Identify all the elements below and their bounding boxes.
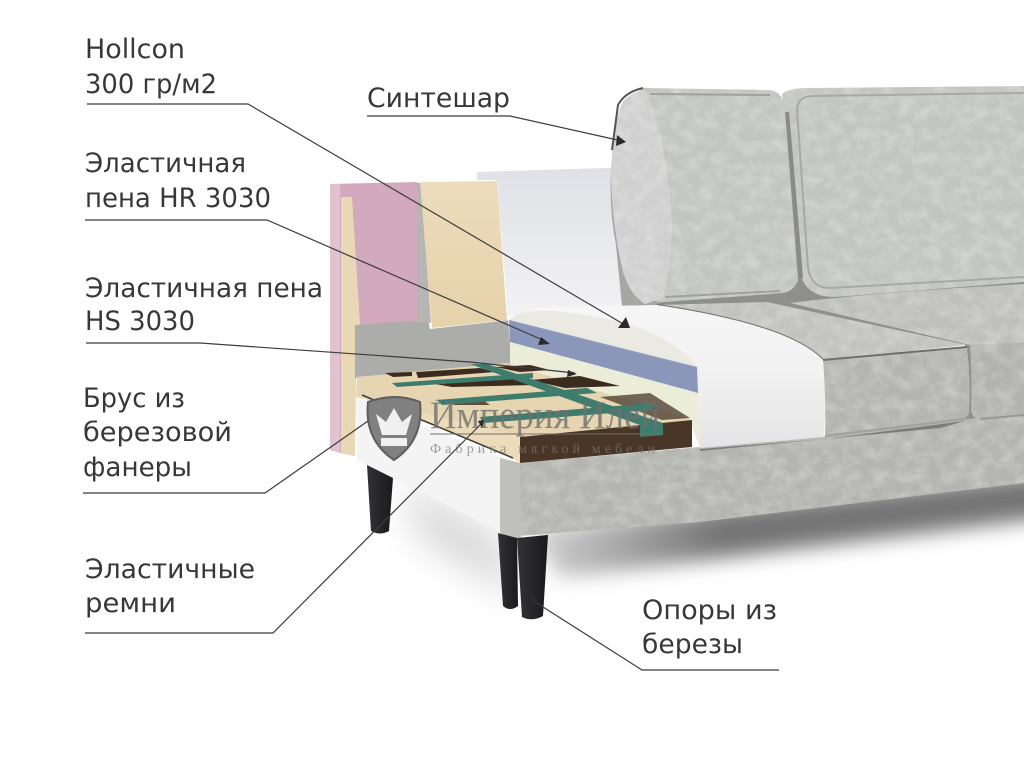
- seat shadow: [700, 421, 965, 451]
- label: Hollcon: Hollcon: [85, 34, 185, 65]
- back cushion right: fold: [787, 112, 801, 278]
- seat foam: cream edge: [509, 311, 697, 367]
- seat cushion left: front: [823, 347, 970, 437]
- seat cushion right: [790, 284, 1024, 419]
- watermark: [368, 394, 660, 460]
- label: Эластичные ремни: [85, 420, 484, 633]
- label: пена HR 3030: Эластичная: [85, 148, 246, 179]
- arm frame: plywood panel: [420, 181, 507, 328]
- back foam block: [477, 168, 640, 317]
- label: Брус из березовой фанеры: березовой: [83, 417, 232, 448]
- back cushion left: [620, 88, 798, 304]
- sofa shadow backing: [640, 100, 1024, 425]
- back cushion seam: [612, 88, 643, 150]
- frame: plywood side: [356, 395, 520, 463]
- floor shadow: [400, 470, 1024, 600]
- frame: plywood deck: [356, 363, 692, 437]
- back cushion side shadow: [611, 170, 657, 306]
- back cushion right: [782, 86, 1024, 297]
- label: Брус из березовой фанеры: Брус из: [83, 383, 185, 414]
- label: Синтешар: Синтешар: [367, 83, 510, 114]
- legs: [367, 465, 548, 619]
- label: пена HR 3030: пена HR 3030: [85, 183, 271, 214]
- label: Эластичные ремни: Эластичные: [85, 554, 255, 585]
- label: пена HR 3030: [85, 148, 550, 345]
- seat cushion left: bottom piping: [825, 419, 965, 436]
- label: пена HS 3030: HS 3030: [85, 306, 195, 337]
- label: Брус из березовой фанеры: фанеры: [83, 452, 192, 483]
- label: Опоры из березы: Опоры из: [642, 595, 777, 626]
- leg front right: [517, 535, 548, 619]
- seat foam: white synthetic layer: [508, 305, 825, 448]
- base upholstery: [500, 414, 1024, 537]
- frame: deck gaps: [385, 365, 690, 420]
- seat foam: cream HS layer: [510, 342, 700, 447]
- label: Брус из березовой фанеры: [83, 383, 368, 493]
- back cushion cut end: [611, 90, 672, 304]
- label: Эластичные ремни: ремни: [85, 588, 176, 619]
- back cushion left: piping: [650, 94, 780, 297]
- elastic belts: [392, 364, 663, 437]
- back cushion right: piping: [797, 93, 1024, 288]
- label: Опоры из березы: березы: [642, 629, 743, 660]
- watermark rule: [430, 433, 660, 435]
- arm frame: plywood upright strip: [341, 197, 360, 456]
- arm frame: grey foam block: [355, 320, 510, 380]
- sofa illustration: [330, 86, 1024, 619]
- frame: dark plywood edge: [520, 420, 692, 463]
- label: Hollcon: [85, 34, 630, 328]
- label: пена HS 3030: Эластичная пена: [85, 273, 323, 304]
- label: Опоры из березы: [529, 595, 779, 670]
- leg front left: [367, 465, 393, 534]
- base corner: [500, 458, 521, 540]
- watermark shield: [368, 397, 420, 460]
- watermark subtitle: Фабрика мягкой мебели: [430, 442, 656, 457]
- arm frame: pink foam panel: [330, 182, 417, 456]
- frame: white side panel: [356, 397, 500, 532]
- seat foam: blue HR layer: [509, 320, 698, 393]
- leg back: [498, 533, 518, 609]
- label: Синтешар: [367, 83, 626, 146]
- seat cushion left: top: [657, 302, 967, 360]
- seat piping: [657, 305, 967, 360]
- label: пена HS 3030: [85, 273, 577, 377]
- label: Hollcon: 300 гр/м2: [85, 69, 217, 100]
- watermark name: Империя Илей: [430, 394, 660, 437]
